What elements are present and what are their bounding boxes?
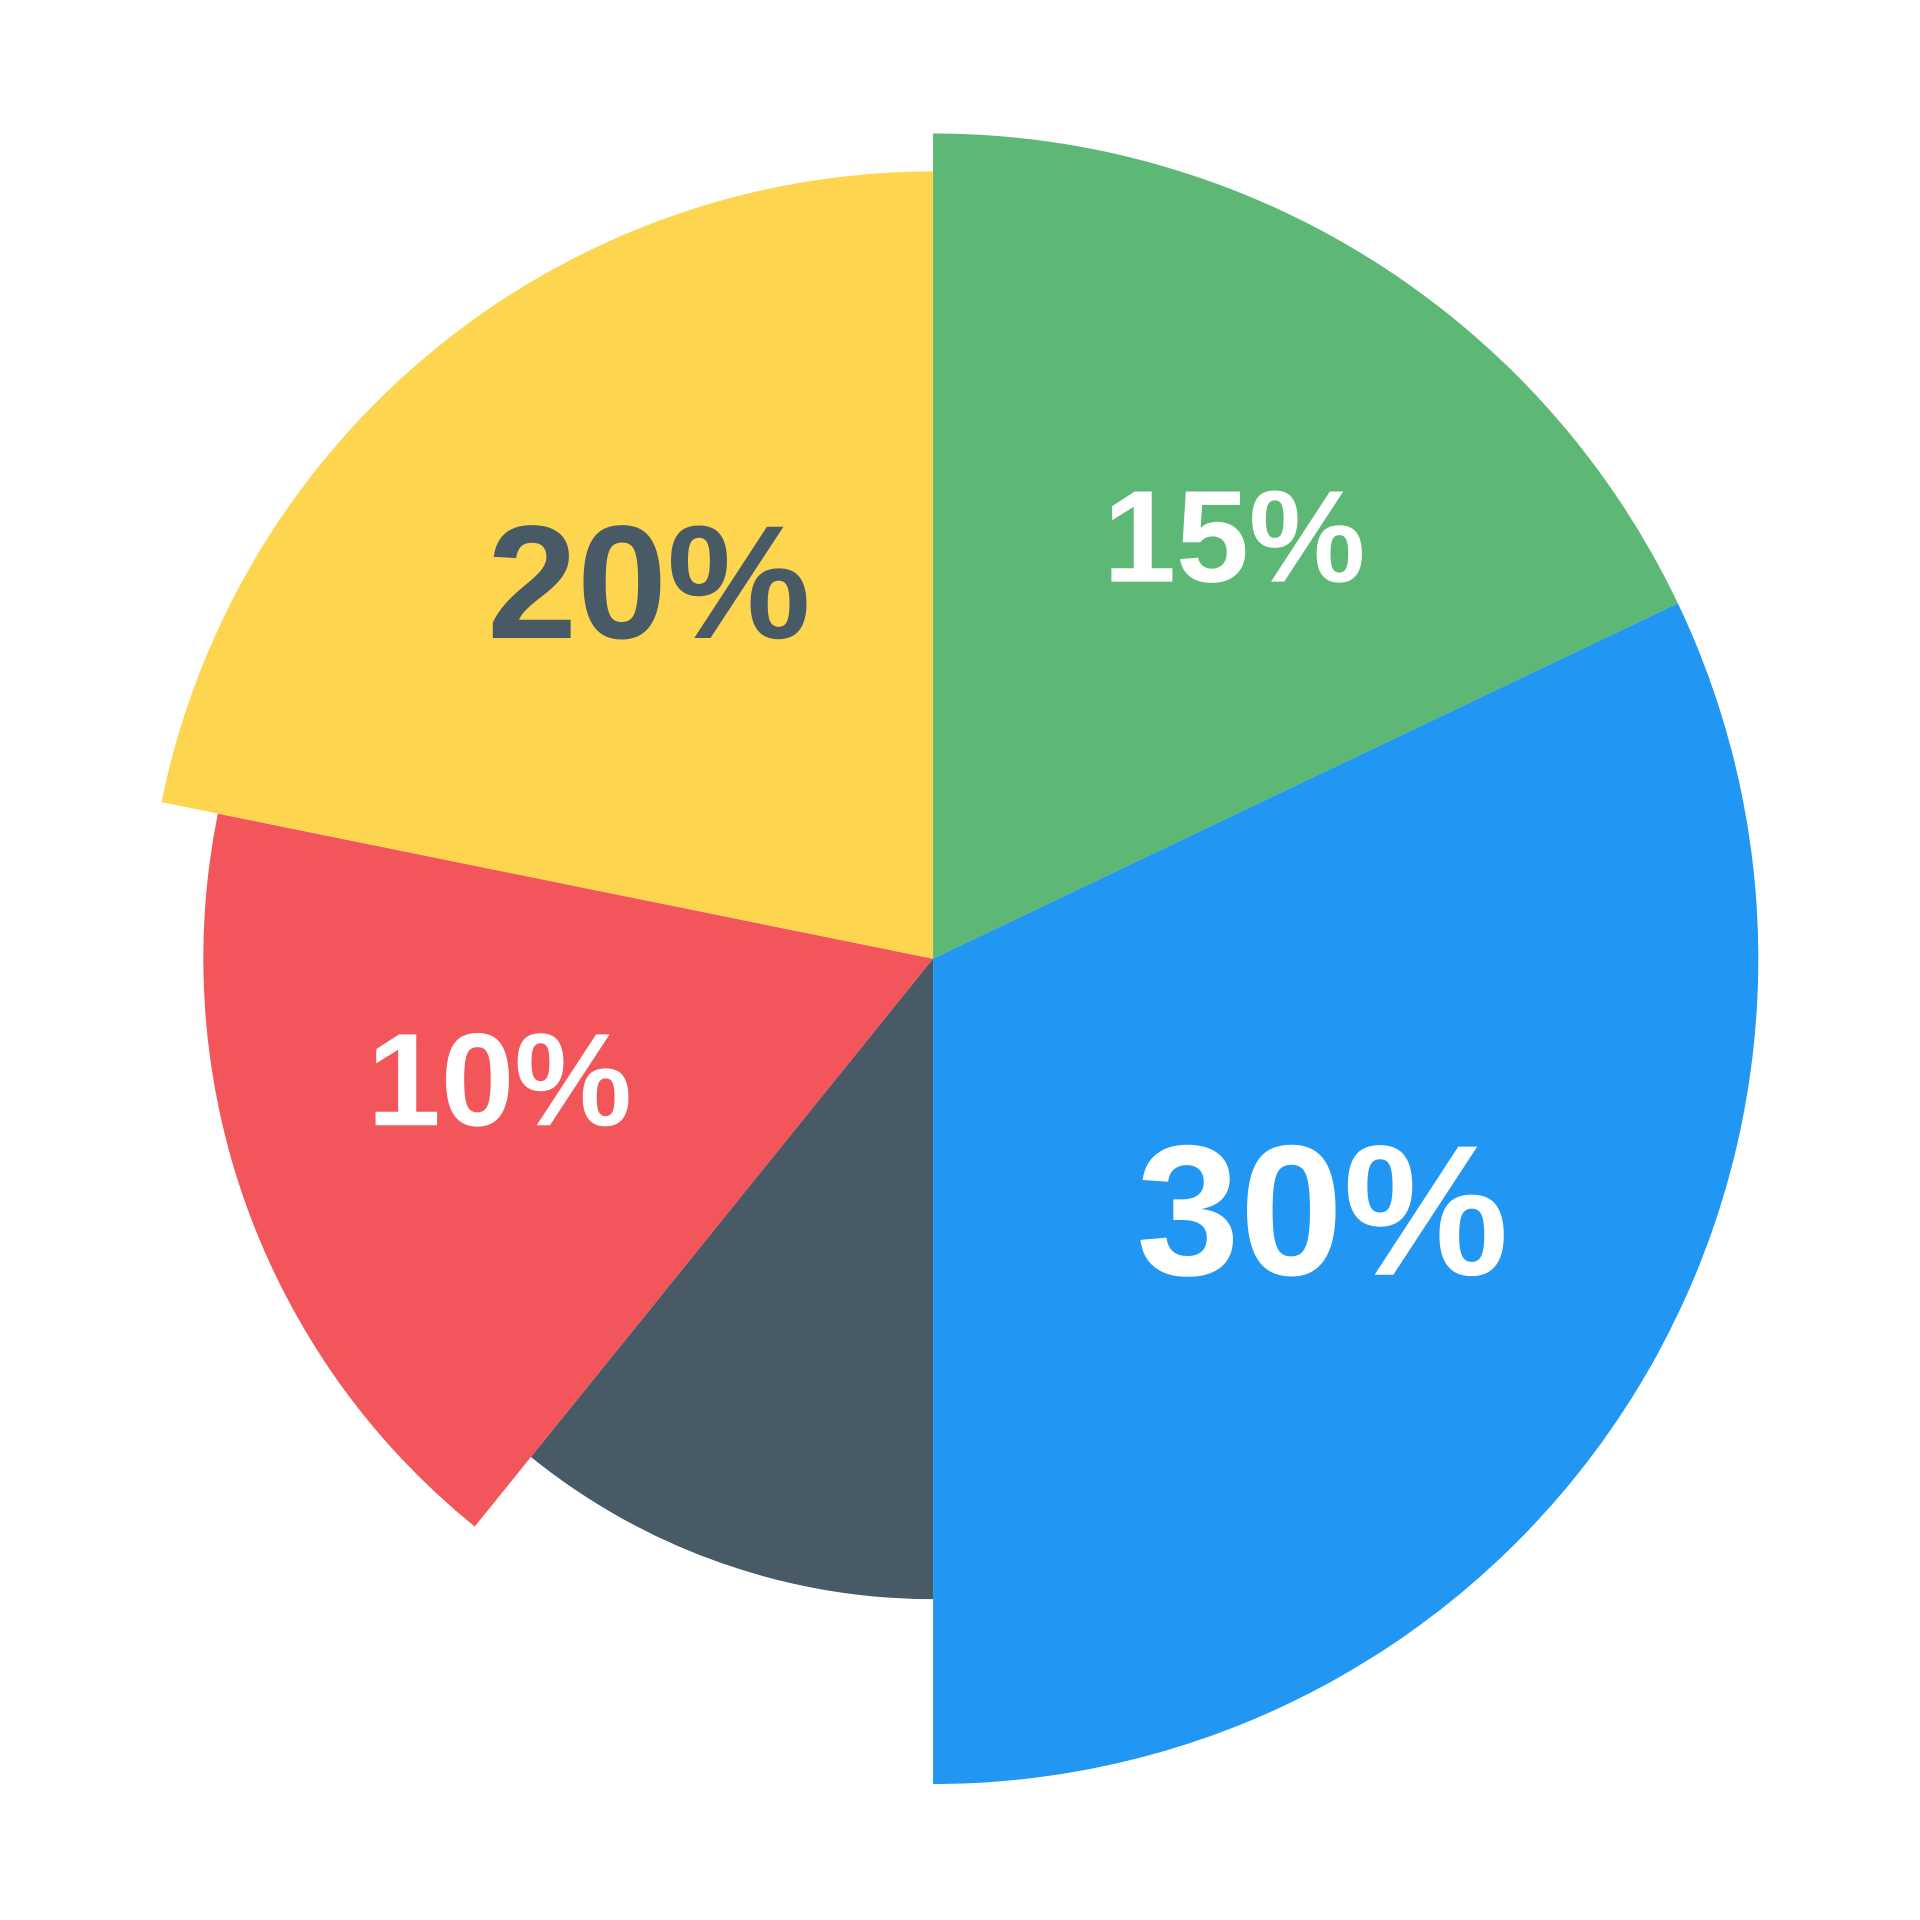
slice: green 15% <box>933 133 1678 959</box>
label: 10%: 10% <box>367 1006 632 1154</box>
label: 30%: 30% <box>1136 1108 1509 1315</box>
label: 20%: 20% <box>487 493 811 673</box>
slice: dark <box>531 959 933 1599</box>
slice: blue 30% <box>933 603 1758 1784</box>
slice: yellow 20% <box>162 171 933 959</box>
slice: red 10% <box>203 814 933 1527</box>
label: 15%: 15% <box>1103 463 1365 610</box>
